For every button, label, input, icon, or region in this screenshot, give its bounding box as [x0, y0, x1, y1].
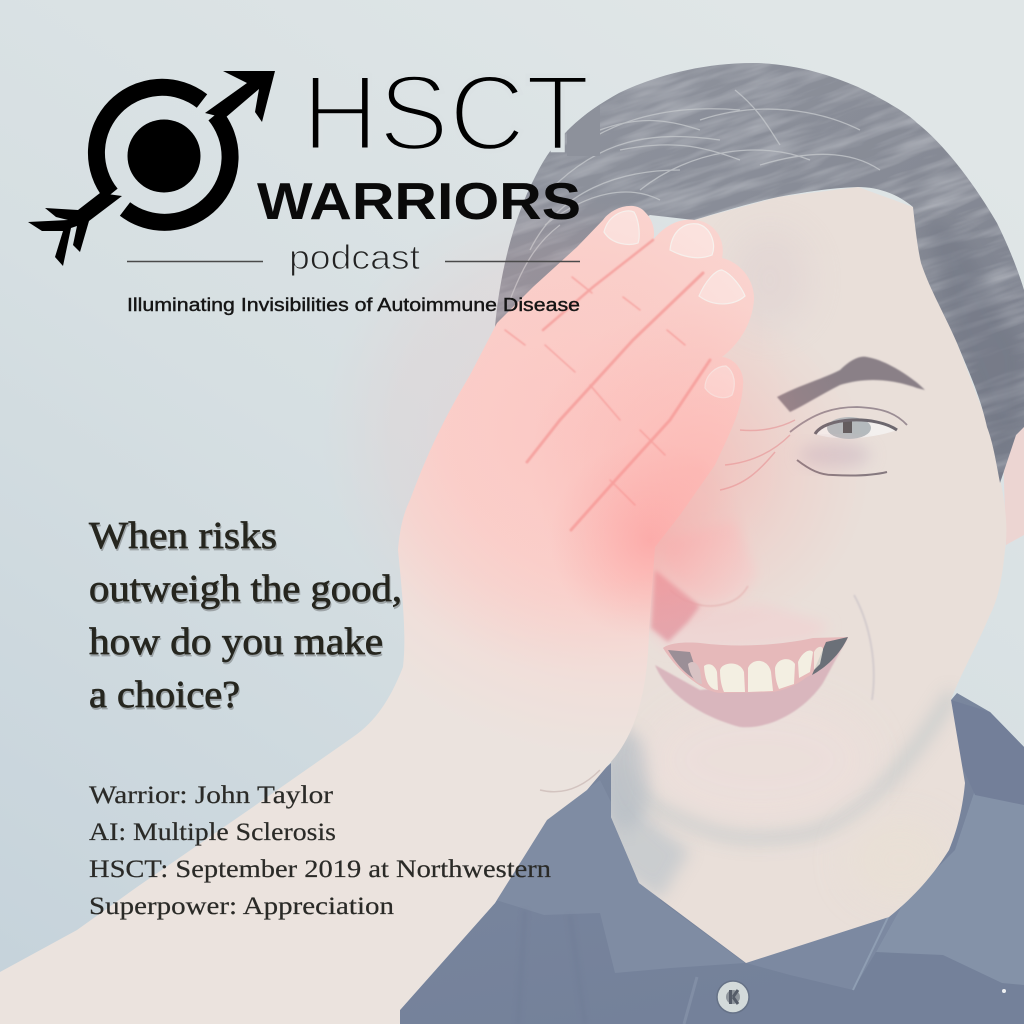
nose and upper lip [649, 520, 830, 649]
tagline: Illuminating Invisibilities of Autoimmune Disease [127, 295, 580, 315]
ear [1003, 425, 1024, 545]
headline question: outweigh the good, [89, 568, 402, 610]
hair [495, 63, 1024, 483]
red glow: background wash [320, 190, 800, 670]
guest details: AI: Multiple Sclerosis [89, 819, 336, 846]
wordmark: HSCT: HSCT [302, 52, 590, 173]
head and neck skin [611, 187, 1006, 963]
hair patch over wordmark halo [567, 100, 600, 156]
guest details [89, 782, 552, 920]
finger creases [505, 240, 710, 530]
shirt highlight dot [1002, 989, 1006, 993]
shirt collar left [496, 780, 745, 973]
fingernails [604, 211, 745, 398]
shirt collar right [876, 790, 1024, 985]
shirt collar centre [746, 900, 905, 990]
guest details: HSCT: September 2019 at Northwestern [89, 856, 552, 883]
eyebrow [777, 357, 925, 412]
hair texture [496, 63, 1024, 482]
hand and arm [0, 206, 754, 1024]
wordmark: WARRIORS: WARRIORS [257, 173, 581, 231]
guest details: Warrior: John Taylor [89, 782, 334, 809]
mouth interior [663, 637, 848, 693]
mouth [655, 637, 848, 727]
wrinkles [720, 420, 795, 490]
podcast label with rules: podcast [289, 239, 421, 277]
headline question: When risks [89, 515, 277, 557]
face shading [600, 230, 953, 900]
red glow: face wash [530, 300, 870, 640]
lower lip [655, 637, 848, 727]
headline question [89, 515, 402, 716]
red glow: core [550, 440, 750, 640]
shirt [400, 693, 1024, 1024]
logo [28, 52, 600, 315]
logo icon: ring with arrow [28, 71, 275, 266]
shirt button [717, 981, 749, 1013]
headline question: how do you make [89, 621, 383, 663]
teeth [688, 647, 823, 692]
headline question: a choice? [89, 674, 240, 716]
guest details: Superpower: Appreciation [89, 893, 395, 920]
eye [790, 407, 907, 476]
